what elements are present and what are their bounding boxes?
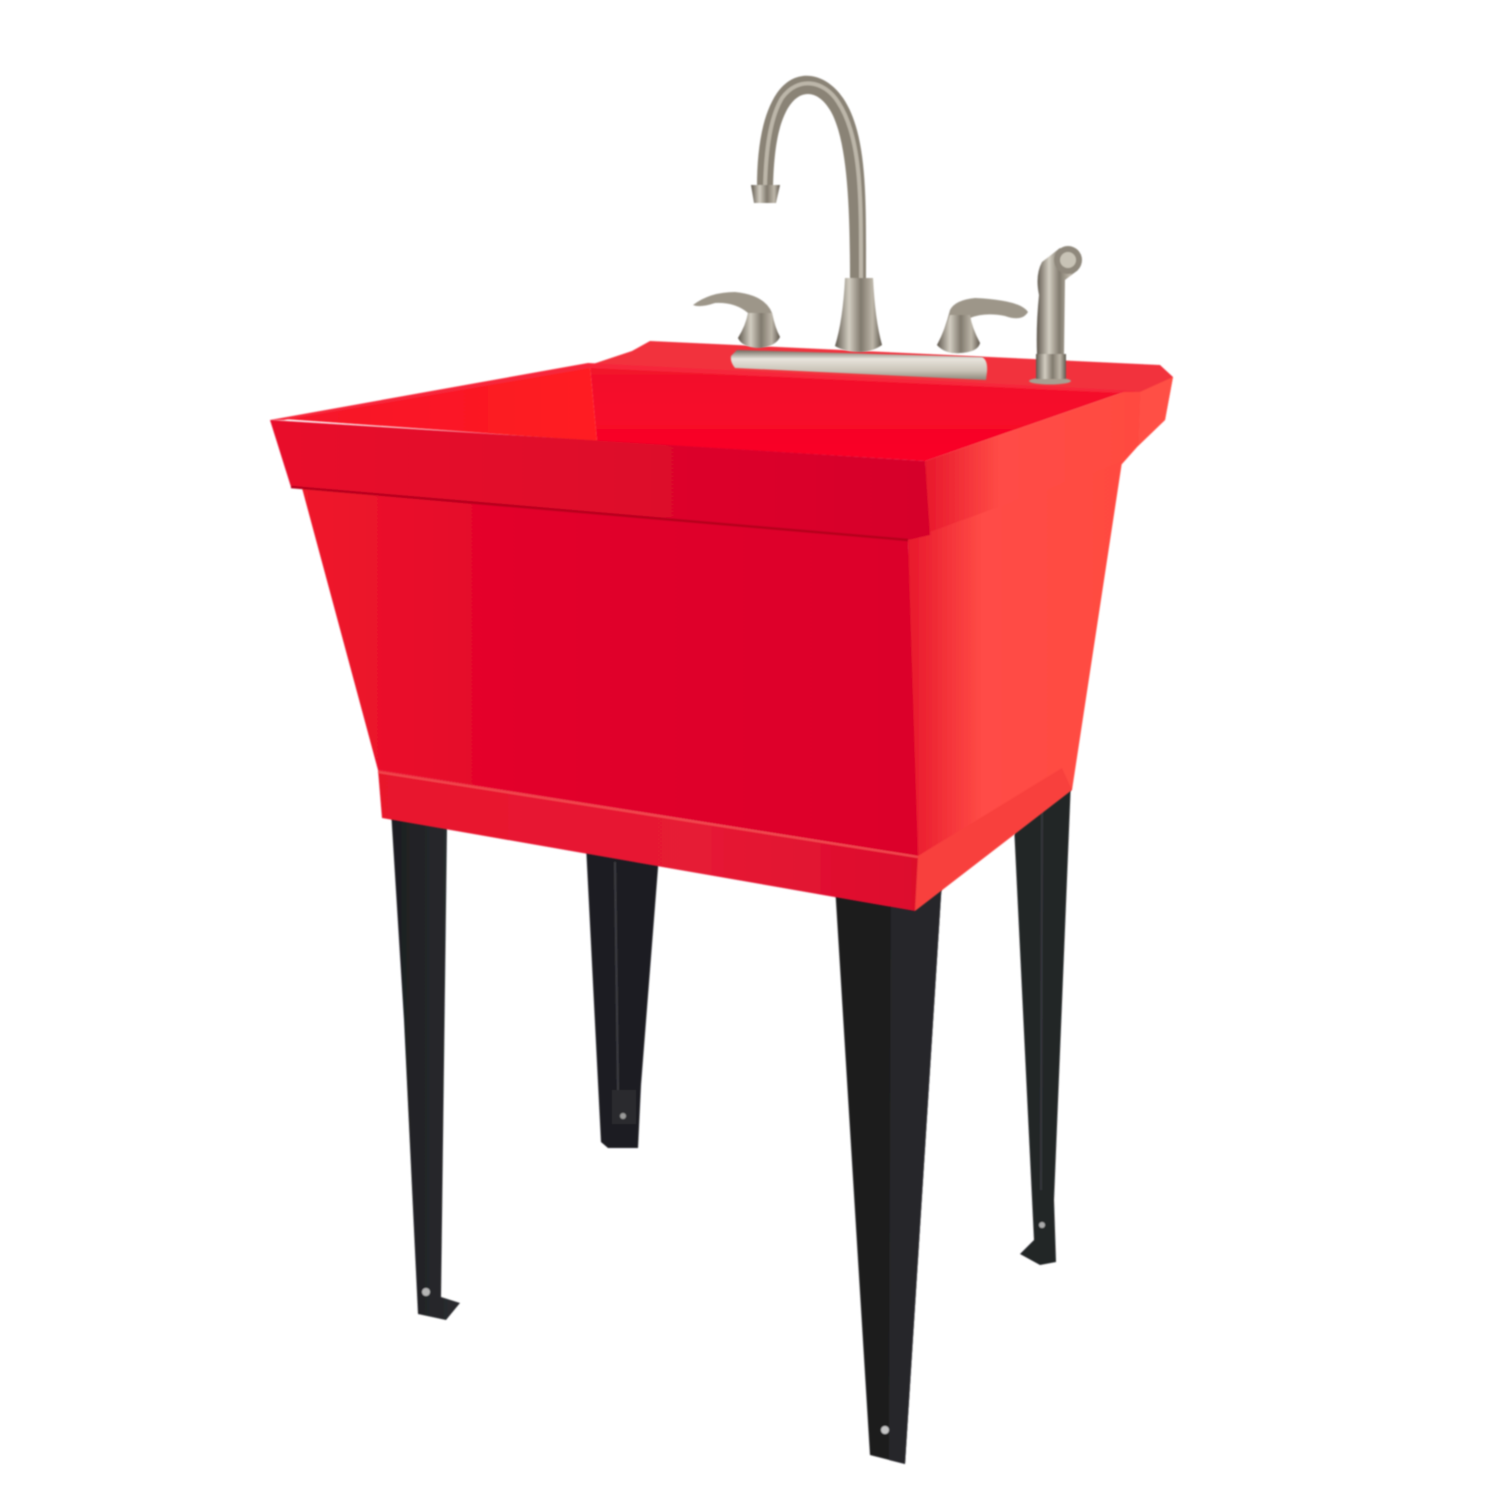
- interior back wall: [590, 366, 1124, 461]
- front panel: [302, 488, 918, 856]
- bottom highlight line: [378, 772, 918, 857]
- handle: right: [937, 298, 1028, 353]
- back ledge: [590, 341, 1173, 446]
- bottom band: [378, 770, 918, 911]
- spout: [751, 76, 866, 280]
- leg: back right: [1014, 780, 1071, 1265]
- tub: [270, 341, 1173, 911]
- right side wall: [908, 462, 1122, 911]
- side sprayer: [1029, 246, 1082, 384]
- deck plate: [731, 350, 987, 380]
- front upper band: [270, 420, 930, 540]
- right side wall upper band: [925, 392, 1140, 538]
- leg: front right: [835, 880, 942, 1464]
- faucet: [693, 76, 1082, 384]
- legs: [391, 780, 1071, 1464]
- spout base: [835, 278, 882, 352]
- leg: back left: [586, 845, 659, 1148]
- rim back edge: [270, 363, 1138, 420]
- band shadow line: [291, 487, 908, 540]
- handle: left: [693, 292, 780, 348]
- bottom right corner: [915, 768, 1072, 911]
- interior left wall: [284, 366, 597, 441]
- leg: front left: [391, 810, 460, 1320]
